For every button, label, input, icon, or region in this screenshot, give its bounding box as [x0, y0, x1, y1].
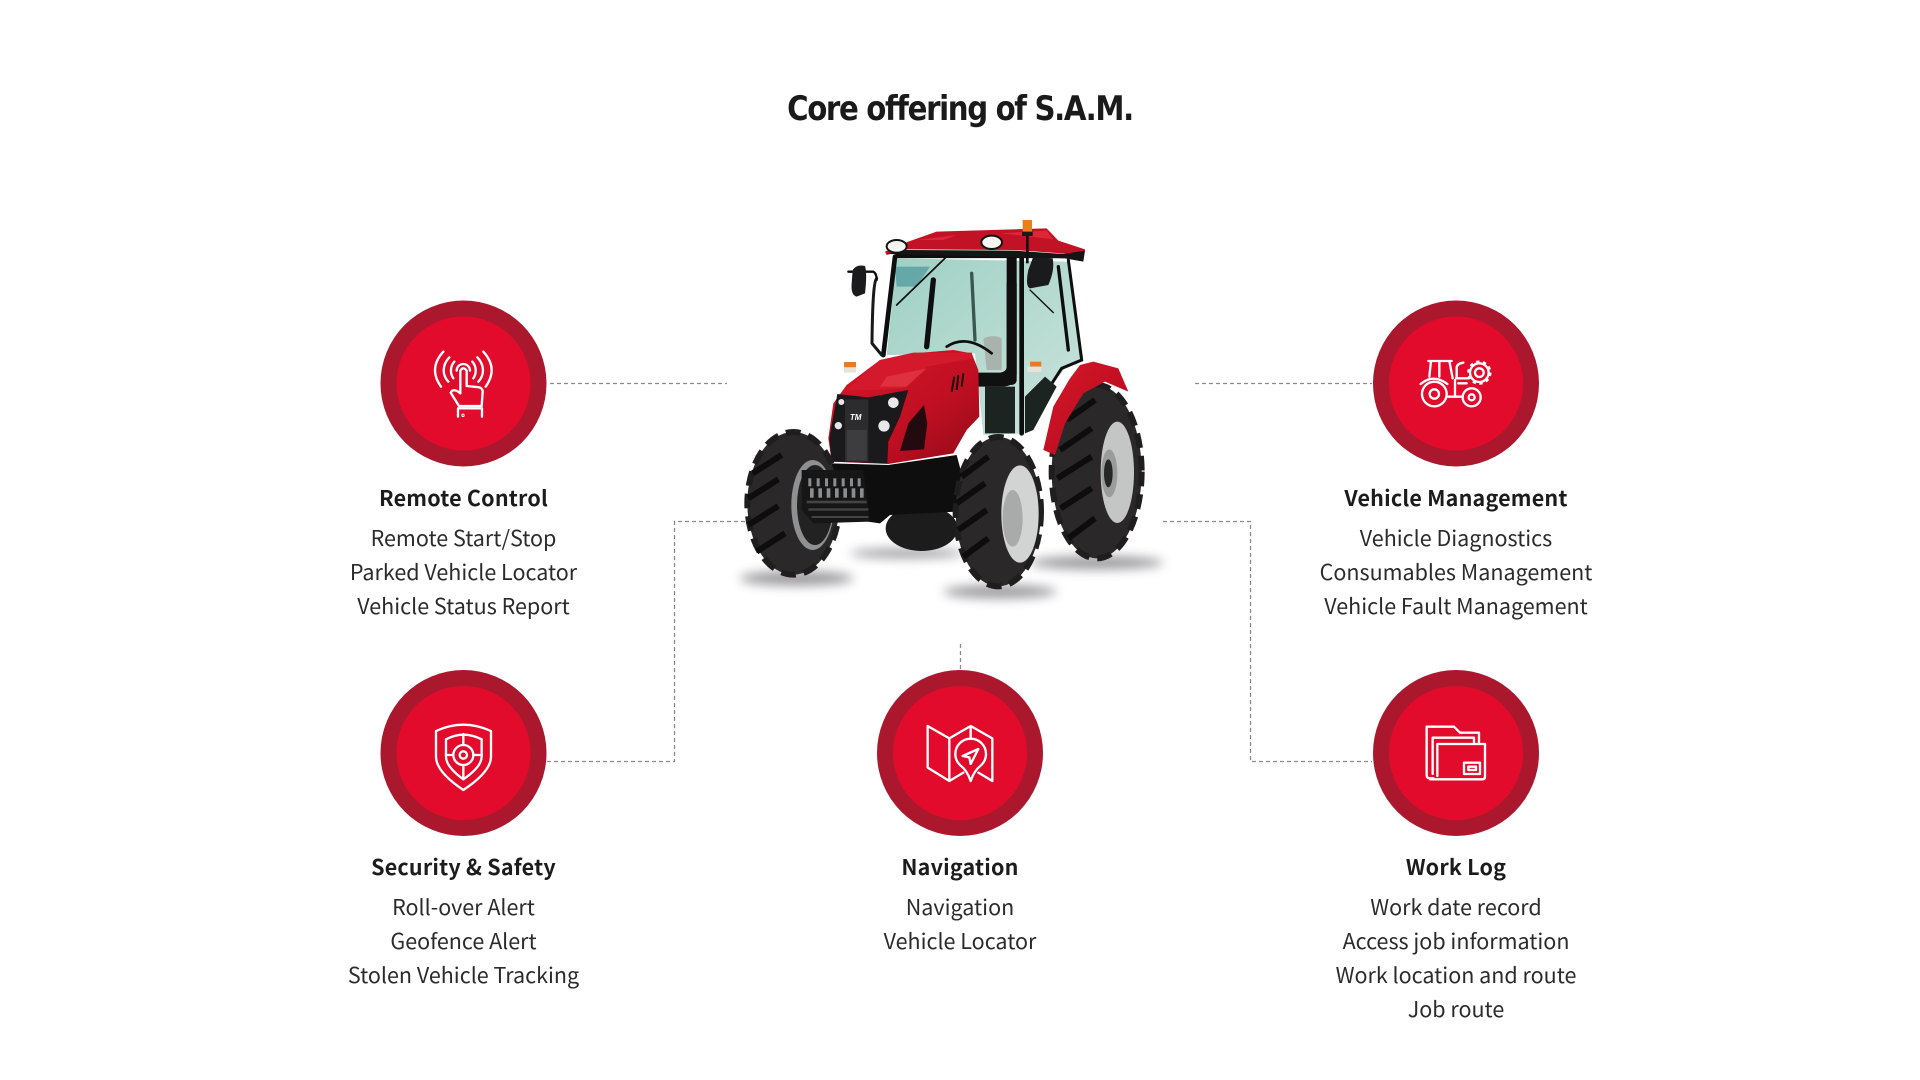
connector: work log to tractor: [1163, 522, 1372, 762]
side mirrors: [852, 257, 1053, 297]
text block: vehicle management: Vehicle Fault Management: [1324, 590, 1588, 621]
text block: work log: Work location and route: [1336, 959, 1576, 990]
tractor illustration: [740, 220, 1163, 598]
text block: vehicle management: Consumables Management: [1320, 556, 1592, 587]
icon badge: remote control: [380, 300, 546, 466]
text block: security and safety: Stolen Vehicle Tracking: [348, 959, 579, 990]
front weights: [802, 470, 870, 523]
chassis: [832, 455, 963, 523]
text block: work log: Access job information: [1343, 925, 1569, 956]
cab frame: [848, 255, 1082, 433]
tractor lower cab dark area: [985, 377, 1057, 433]
text block: navigation: Vehicle Locator: [884, 925, 1036, 956]
text block: security and safety: Geofence Alert: [390, 925, 537, 956]
text block: remote control: Parked Vehicle Locator: [350, 556, 577, 587]
connector: navigation to tractor: [960, 644, 962, 670]
roof work lights: [887, 236, 1002, 253]
front grille and headlights: TM: [850, 413, 862, 422]
text block: vehicle management: [1320, 482, 1592, 621]
connector: security and safety to tractor: [547, 522, 750, 762]
icon badge: work log: [1373, 670, 1539, 836]
rear wheel: [1052, 385, 1142, 558]
side turn lamps: [844, 362, 1041, 367]
connector: remote control to tractor: [550, 382, 727, 384]
cab interior: seat and dashboard: [895, 267, 1002, 370]
text block: navigation: Navigation: [906, 891, 1014, 922]
text block: work log: Work Log: [1406, 851, 1506, 882]
cab roof: [885, 228, 1085, 262]
text block: security and safety: Security & Safety: [371, 851, 556, 882]
text block: remote control: [350, 482, 578, 621]
text block: work log: [1336, 851, 1576, 1024]
connector: vehicle management to tractor: [1195, 382, 1372, 384]
text block: work log: Job route: [1408, 993, 1504, 1024]
rear fender: [1043, 362, 1128, 455]
text block: remote control: Remote Start/Stop: [371, 522, 556, 553]
front grille and headlights: [829, 390, 908, 463]
text block: navigation: Navigation: [901, 851, 1019, 882]
text block: remote control: Vehicle Status Report: [357, 590, 570, 621]
front left wheel: [747, 432, 839, 575]
rear inner wheel: [886, 506, 958, 551]
beacon: [1022, 220, 1033, 263]
text block: vehicle management: Vehicle Diagnostics: [1360, 522, 1552, 553]
icon badge: navigation: [877, 670, 1043, 836]
tractor ground shadows: [740, 549, 1163, 598]
icon badge: security and safety: [380, 670, 546, 836]
front right wheel: [956, 437, 1041, 586]
text block: navigation: [884, 851, 1036, 956]
icon badge: vehicle management: [1373, 300, 1539, 466]
text block: work log: Work date record: [1370, 891, 1542, 922]
engine hood: [828, 350, 979, 464]
text block: security and safety: Roll-over Alert: [392, 891, 535, 922]
text block: security and safety: [348, 851, 579, 990]
title: Core offering of S.A.M.: [787, 89, 1133, 129]
text block: remote control: Remote Control: [379, 482, 548, 513]
cab glass: [887, 258, 1083, 435]
text block: vehicle management: Vehicle Management: [1344, 482, 1568, 513]
exhaust pipe: [970, 283, 1017, 387]
